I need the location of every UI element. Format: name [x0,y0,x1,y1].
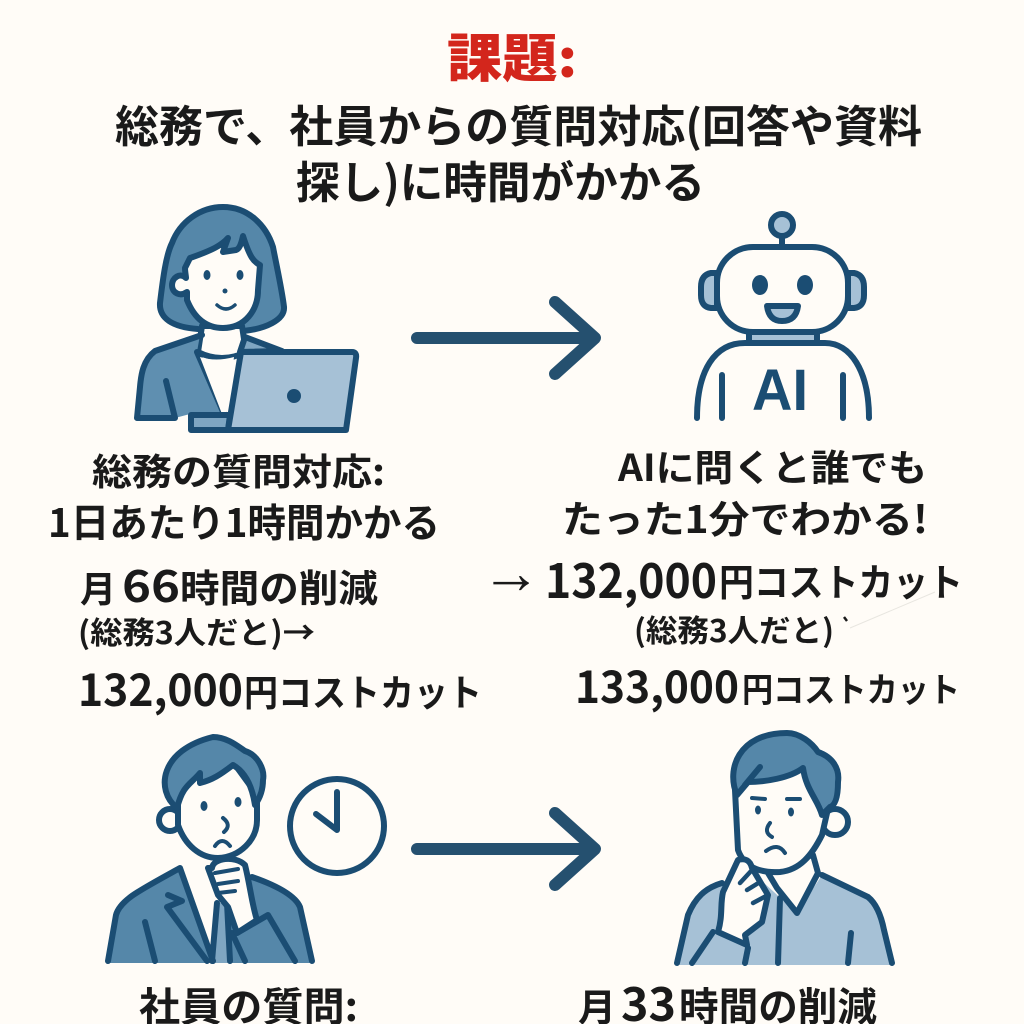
heading: problem statement: 探し)に時間がかかる [296,147,705,211]
arrow: top [417,302,595,374]
text block: left savings: (総務3人だと)→ [78,608,315,653]
text block: right savings: 円コストカット [742,663,960,712]
text block: left savings: 月 [80,561,116,613]
text block: left savings: 時間の削減 [180,558,378,613]
text block: right savings: → [481,539,541,606]
icon: woman at laptop [137,207,356,430]
text block: general affairs handling time: 1日あたり1時間かかる [48,493,440,549]
text: monthly 33 hours saved [578,969,877,1024]
text block: right savings [481,539,963,716]
text block: left savings: 132,000 [78,655,243,719]
icon: AI robot [697,214,869,423]
heading: problem statement: 総務で、社員からの質問対応(回答や資料 [115,91,922,155]
text block: AI answers in one minute: たった1分でわかる! [562,489,928,544]
icon: worried man in shirt [677,733,892,965]
text block: right savings: 132,000 [545,543,717,612]
text block: right savings: (総務3人だと) [634,606,834,651]
title: 課題: 課題: [447,17,577,92]
text block: left savings [78,553,482,719]
icon: AI robot: AI [752,358,808,423]
text block: left savings: 円コストカット [244,663,482,717]
text block: left savings: 66 [122,553,180,615]
text block: AI answers in one minute: AIに問くと誰でも [617,438,927,492]
text block: right savings: 133,000 [575,652,739,716]
arrow: bottom [417,813,595,885]
icon: thinking man in suit with clock [108,737,384,963]
heading: problem statement [115,91,922,211]
text block: general affairs handling time [48,442,440,549]
text block: right savings: 円コストカット [719,552,963,607]
text block: general affairs handling time: 総務の質問対応: [92,442,385,496]
text block: AI answers in one minute [562,438,928,544]
